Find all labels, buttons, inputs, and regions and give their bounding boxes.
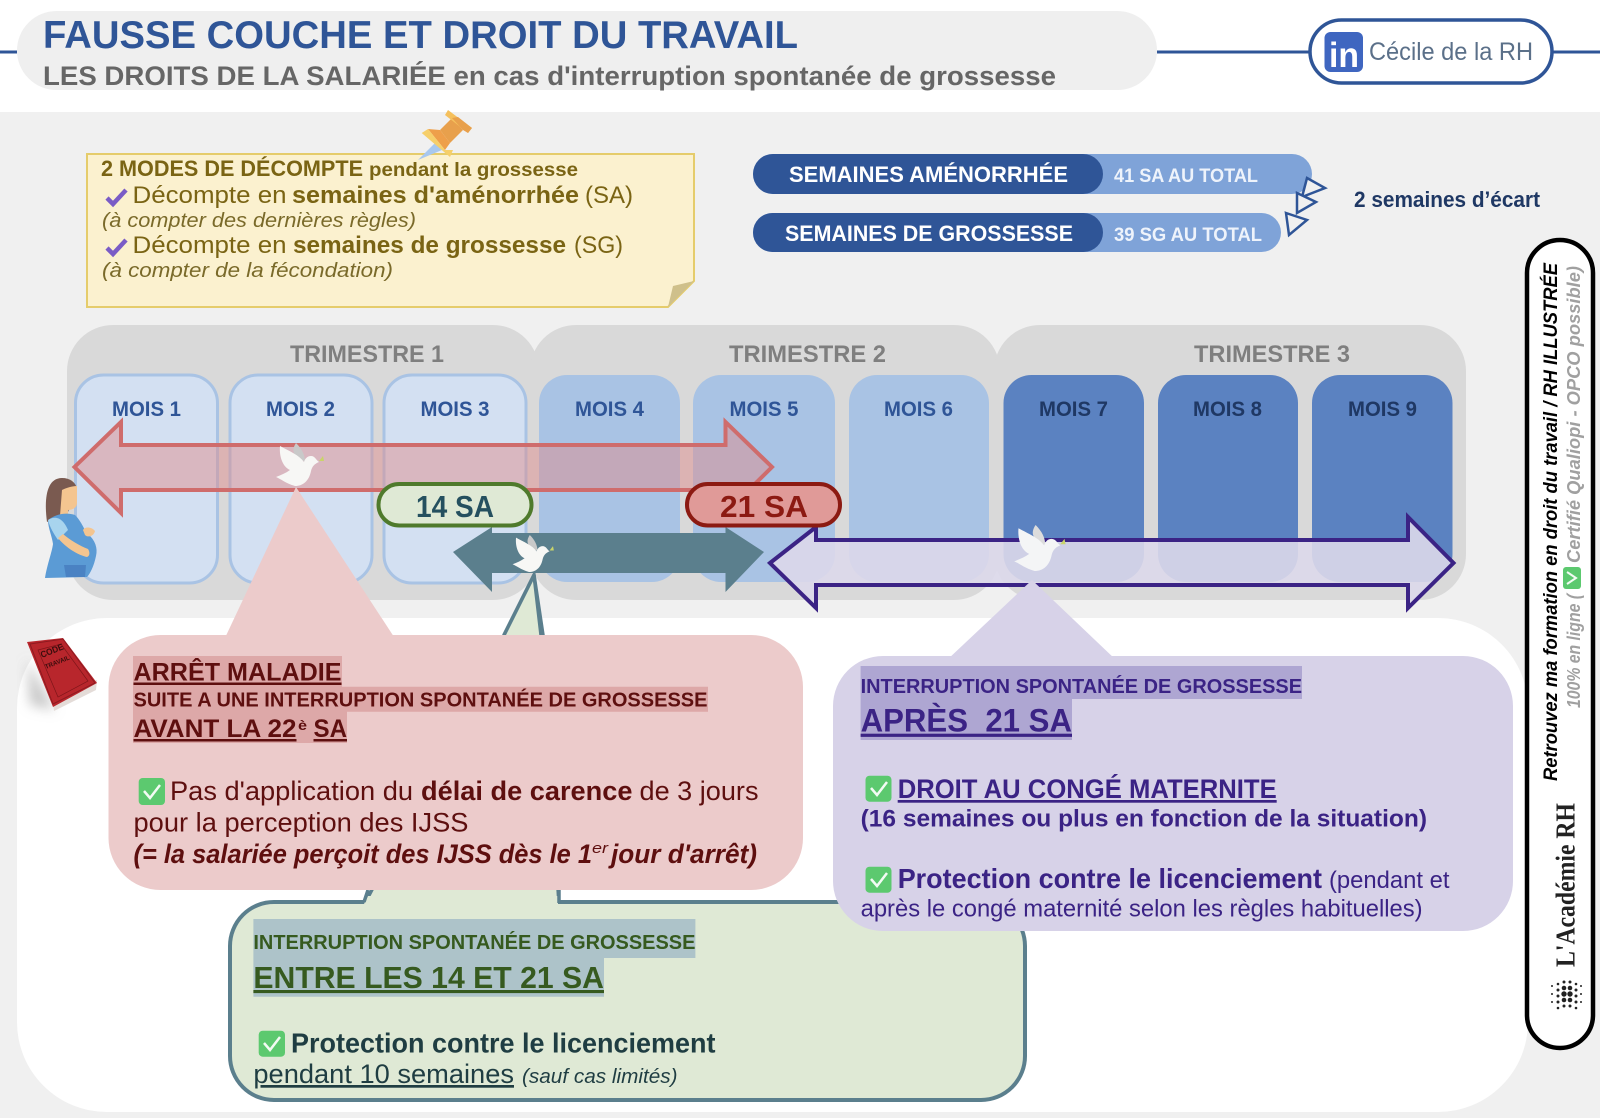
month 6 (849, 375, 989, 582)
online text: 100% en ligne ( (1564, 592, 1584, 708)
header band (0, 0, 1600, 112)
note: 2 modes de decompte: (SG) (574, 232, 623, 259)
month 4 (539, 375, 680, 582)
formation text: Retrouvez ma formation en droit du travail / RH ILLUSTRÉE (1540, 262, 1562, 781)
protection note: après le congé maternité selon les règles habituelles) (861, 896, 1423, 923)
note: 2 modes de decompte (87, 154, 694, 307)
month 4: MOIS 4 (575, 398, 644, 421)
note: 2 modes de decompte: Décompte en (132, 232, 286, 259)
month 9: MOIS 9 (1348, 398, 1417, 421)
arrow: entre 14 et 21 SA (453, 527, 764, 592)
month 1: MOIS 1 (112, 398, 181, 421)
month 7 (1004, 375, 1144, 582)
note: 2 modes de decompte: (à compter des dernières règles) (102, 210, 416, 232)
pointer and box: green callout (230, 575, 1025, 1100)
arrow: arret maladie period (74, 422, 772, 513)
lower white panel (17, 618, 1528, 1112)
milestone: 14 SA: 14 SA (416, 489, 494, 524)
icon: check (139, 778, 165, 805)
bar: semaines amenorrhee (753, 154, 1312, 194)
heading: APRÈS 21 SA (861, 703, 1072, 739)
protection note: (pendant et (1329, 867, 1450, 894)
month 8 (1158, 375, 1298, 582)
month 9 (1312, 375, 1452, 582)
subtitle: LES DROITS DE LA SALARIÉE en cas d'interruption spontanée de grossesse (43, 60, 1056, 91)
body text: pour la perception des IJSS (134, 808, 468, 838)
note: 2 modes de decompte: 2 MODES DE DÉCOMPTE (101, 156, 363, 181)
droit au conge maternite: DROIT AU CONGÉ MATERNITE (898, 773, 1277, 804)
body text: jour d'arrêt) (608, 839, 757, 869)
panel: trimestre 1 (67, 325, 539, 600)
protection note (861, 867, 1450, 923)
arrow: apres 21 SA (770, 517, 1454, 608)
icon: dove on purple arrow (1014, 525, 1066, 571)
title: FAUSSE COUCHE ET DROIT DU TRAVAIL (43, 14, 798, 57)
note: 2 modes de decompte: pendant la grossesse (369, 160, 578, 181)
protection text: Protection contre le licenciement (898, 863, 1322, 894)
bar: semaines de grossesse: SEMAINES DE GROSSESSE (785, 221, 1073, 246)
linkedin badge: in (1329, 36, 1359, 75)
icon: dove on teal arrow (513, 535, 554, 572)
month 8: MOIS 8 (1193, 398, 1262, 421)
subheading: SUITE A UNE INTERRUPTION SPONTANÉE DE GROSSESSE (134, 688, 708, 712)
icon: academie dots (1551, 980, 1582, 1009)
icon: code du travail book (27, 638, 97, 711)
academie text: L'Académie RH (1550, 803, 1580, 967)
body text (134, 776, 758, 869)
milestone: 21 SA (687, 484, 840, 526)
icon: check (259, 1031, 285, 1057)
header connector line (0, 50, 1600, 54)
icon: qualiopi check (1563, 567, 1581, 589)
month 2: MOIS 2 (266, 398, 335, 421)
note: 2 modes de decompte: (à compter de la fécondation) (102, 260, 393, 282)
highlights (133, 656, 708, 743)
icon: pregnant woman (45, 478, 97, 578)
bar: semaines de grossesse (753, 213, 1281, 252)
bar: semaines amenorrhee: 41 SA AU TOTAL (1114, 166, 1258, 187)
title block (17, 11, 1157, 91)
heading: arret maladie: ARRÊT MALADIE (134, 656, 342, 686)
qualiopi text: Certifié Qualiopi - OPCO possible) (1564, 266, 1584, 563)
milestone: 21 SA: 21 SA (720, 489, 808, 524)
heading: ENTRE LES 14 ET 21 SA (253, 960, 604, 995)
month 3: MOIS 3 (420, 398, 490, 421)
month 5: MOIS 5 (730, 398, 799, 421)
icon: code du travail book: CODE (39, 642, 65, 660)
label: 2 semaines d'ecart: 2 semaines d’écart (1354, 187, 1541, 212)
linkedin badge (1310, 20, 1552, 83)
body text: délai de carence (421, 776, 632, 806)
subheading: INTERRUPTION SPONTANÉE DE GROSSESSE (861, 675, 1302, 698)
icon: dove on red arrow (276, 443, 324, 486)
body text: (= la salariée perçoit des IJSS dès le 1 (134, 839, 592, 869)
month 7: MOIS 7 (1039, 398, 1108, 421)
body text: Pas d'application du (170, 776, 413, 806)
body text: de 3 jours (640, 776, 758, 806)
exception text: (sauf cas limités) (522, 1066, 678, 1088)
heading: TRIMESTRE 1 (290, 341, 444, 368)
pointer: purple callout (947, 580, 1116, 660)
icon: check (866, 867, 892, 893)
month 1 (76, 375, 218, 583)
highlights (253, 919, 695, 997)
note: 2 modes de decompte: semaines d'aménorrhée (292, 182, 579, 209)
heading: avant la 22e SA: AVANT LA 22 (134, 715, 296, 743)
note: 2 modes de decompte: (SA) (585, 182, 633, 209)
heading: TRIMESTRE 3 (1194, 341, 1350, 368)
month 2 (230, 375, 372, 583)
body text: er (592, 840, 609, 857)
icon: gap arrows (1286, 178, 1325, 235)
note: 2 modes de decompte: semaines de grossesse (293, 232, 566, 259)
bar: semaines amenorrhee: SEMAINES AMÉNORRHÉE (789, 162, 1068, 187)
panel: entre 14 et 21 SA text (253, 919, 716, 1089)
highlights (861, 666, 1302, 740)
duration text: (16 semaines ou plus en fonction de la situation) (861, 806, 1427, 833)
panel: trimestre 2 (530, 325, 1000, 600)
milestone: 14 SA (378, 484, 532, 526)
heading: avant la 22e SA: è (298, 717, 307, 733)
pointer: red callout (224, 487, 396, 640)
note: 2 modes de decompte: Décompte en (132, 182, 286, 209)
subheading: INTERRUPTION SPONTANÉE DE GROSSESSE (253, 931, 695, 954)
icon: code du travail book: TRAVAIL (44, 655, 71, 671)
bar: semaines de grossesse: 39 SG AU TOTAL (1114, 225, 1262, 246)
icon: push pin (418, 110, 472, 160)
panel: trimestre 3 (994, 325, 1466, 600)
month 6: MOIS 6 (884, 398, 953, 421)
heading: avant la 22e SA: SA (314, 715, 347, 743)
panel: arret maladie (108, 635, 803, 890)
duration text: pendant 10 semaines (253, 1059, 514, 1089)
month 5 (693, 375, 835, 582)
month 3 (384, 375, 526, 583)
side banner: formation (1527, 240, 1593, 1048)
linkedin badge: Cécile de la RH (1369, 38, 1533, 66)
panel: apres 21 SA (833, 656, 1513, 931)
icon: check (866, 776, 892, 802)
protection text: Protection contre le licenciement (291, 1028, 716, 1059)
heading: TRIMESTRE 2 (729, 341, 886, 368)
